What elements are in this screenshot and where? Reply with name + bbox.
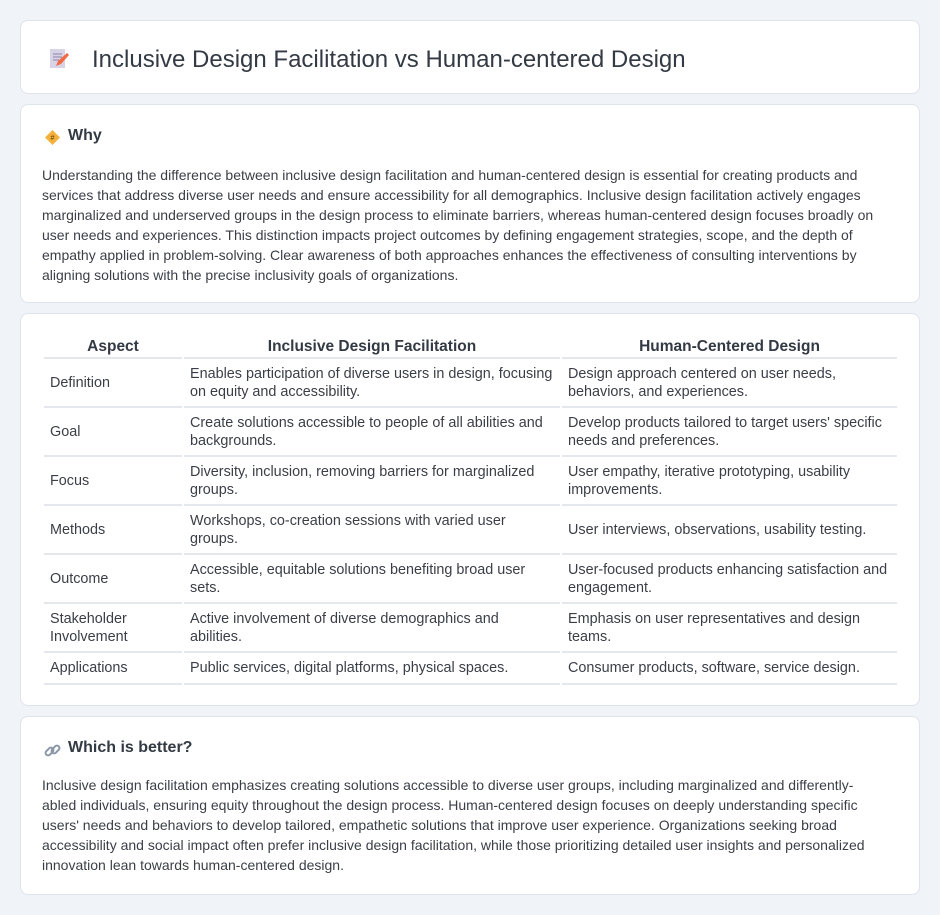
heading: which is better: Which is better?	[68, 739, 192, 756]
table: Stakeholder Involvement	[50, 610, 128, 644]
text: which body: accessibility and social impact often prefer inclusive design facilitation, while those prioritizing detailed user insights and personalized	[42, 837, 865, 853]
text: which body	[42, 777, 865, 873]
table: Public services, digital platforms, physical spaces.	[190, 660, 508, 676]
table: Create solutions accessible to people of all abilities and backgrounds.	[190, 414, 543, 448]
table: User empathy, iterative prototyping, usability improvements.	[568, 464, 850, 498]
table: Emphasis on user representatives and design teams.	[568, 610, 860, 644]
table: User interviews, observations, usability testing.	[568, 522, 866, 538]
text: which body: abled individuals, ensuring equity throughout the design process. Human-centered design focuses on deeply understanding specific	[42, 797, 858, 813]
table: Consumer products, software, service design.	[568, 660, 860, 676]
table: Outcome	[50, 570, 108, 586]
table: Workshops, co-creation sessions with varied user groups.	[190, 512, 506, 546]
icon: link	[44, 744, 60, 756]
table: Develop products tailored to target users' specific needs and preferences.	[568, 414, 882, 448]
table: Diversity, inclusion, removing barriers for marginalized groups.	[190, 464, 534, 498]
table: Applications	[50, 660, 128, 676]
text: which body: Inclusive design facilitation emphasizes creating solutions accessible to diverse user groups, including marginalized and differently-	[42, 777, 853, 793]
table: User-focused products enhancing satisfaction and engagement.	[568, 562, 887, 596]
table: Aspect	[87, 338, 139, 354]
icon: diamond: #	[51, 135, 55, 142]
text: why body: Understanding the difference between inclusive design facilitation and human-centered design is essential for creating products and services that address diverse user needs and ensure accessibility for all demographics. Inclusive design facilitation actively engages marginalized and underserved groups in the design process to eliminate barriers, whereas human-centered design focuses broadly on user needs and experiences. This distinction impacts project outcomes by defining engagement strategies, scope, and the depth of empathy applied in problem-solving. Clear awareness of both approaches enhances the effectiveness of consulting interventions by aligning solutions with the precise inclusivity goals of organizations.	[42, 167, 873, 283]
table: Enables participation of diverse users in design, focusing on equity and accessibility.	[190, 366, 552, 400]
text: which body: innovation lean towards human-centered design.	[42, 857, 344, 873]
table: Accessible, equitable solutions benefiting broad user sets.	[190, 562, 525, 596]
table: Design approach centered on user needs, behaviors, and experiences.	[568, 366, 836, 400]
table	[44, 338, 897, 685]
panel: which is better	[20, 716, 920, 895]
table: Inclusive Design Facilitation	[268, 338, 476, 354]
title: Inclusive Design Facilitation vs Human-centered Design	[92, 46, 686, 73]
table: Goal	[50, 424, 80, 440]
icon: diamond	[45, 130, 60, 145]
panel: comparison table	[20, 313, 920, 706]
text: which body: users' needs and behaviors to develop tailored, empathetic solutions that improve user experience. Organizations seeking broad	[42, 817, 837, 833]
table: Focus	[50, 472, 89, 488]
icon: document pencil	[50, 49, 69, 68]
table: Human-Centered Design	[639, 338, 820, 354]
table: Active involvement of diverse demographics and abilities.	[190, 610, 499, 644]
table: Methods	[50, 522, 105, 538]
header card	[20, 20, 920, 94]
panel: why	[20, 104, 920, 303]
table: Definition	[50, 374, 110, 390]
heading: why: Why	[68, 127, 102, 144]
